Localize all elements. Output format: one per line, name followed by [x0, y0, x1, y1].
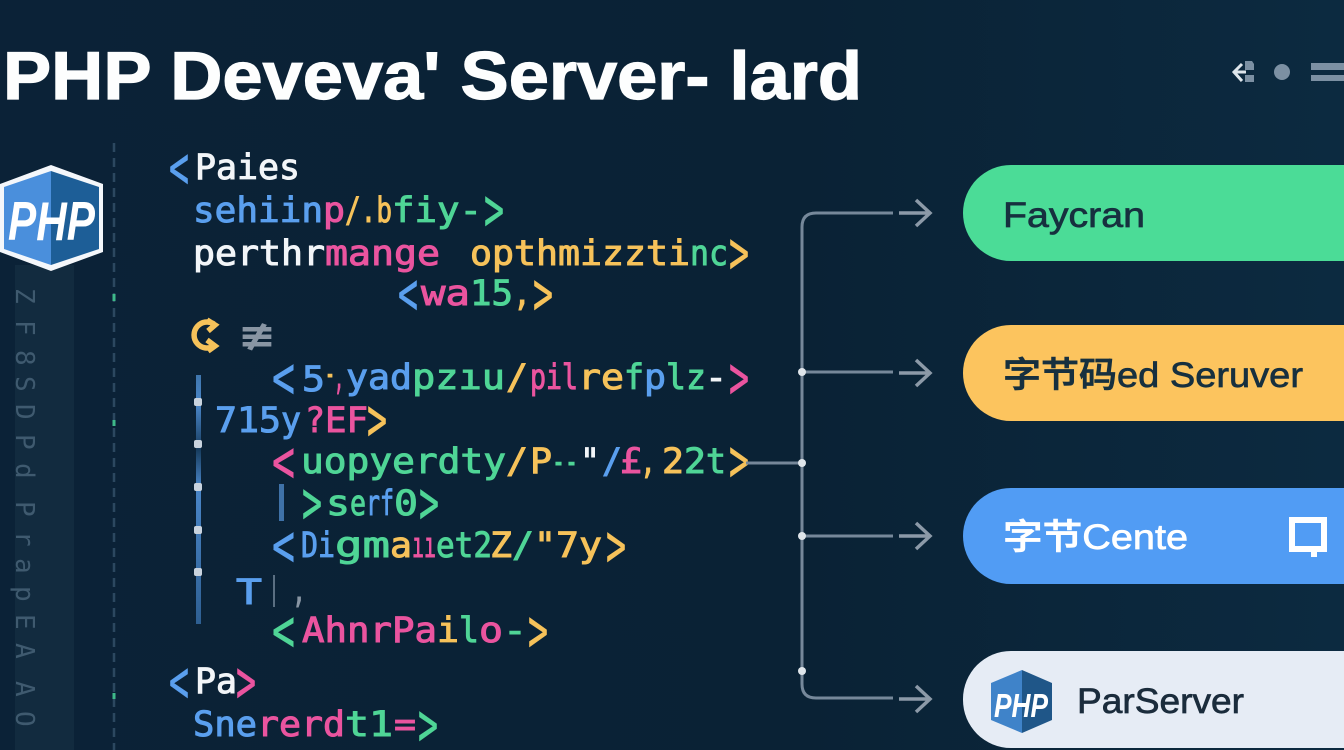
code line 2: p	[323, 191, 345, 231]
left gutter column: O	[9, 711, 39, 727]
code line 12: AhnrPa	[302, 611, 437, 651]
code line 6: f	[624, 358, 644, 398]
code line 2: >	[484, 175, 504, 245]
code line 9: s	[326, 484, 350, 524]
code line 12: o	[479, 611, 503, 651]
code line 10: >	[606, 511, 626, 581]
code line 7	[215, 385, 387, 455]
code line 3: perthr	[193, 234, 325, 274]
icon: yellow refresh glyph	[194, 320, 215, 351]
code line 10: Z	[490, 526, 512, 566]
code line 8	[272, 426, 749, 497]
code line 6: re	[578, 358, 624, 398]
code line 3	[193, 218, 749, 288]
code line 2: fiy-	[392, 191, 482, 231]
code line 7: ?	[305, 401, 325, 441]
not-equal glyph: ≢	[241, 311, 273, 360]
code line 1: Paies	[195, 148, 300, 188]
code line 9	[279, 468, 439, 538]
code line 14: rerd	[257, 705, 345, 745]
code line 1: <	[169, 133, 189, 203]
code line 7: >	[367, 385, 387, 455]
code line 3: >	[729, 218, 749, 288]
code line 6: <	[272, 343, 295, 413]
dashed gutter line	[112, 143, 116, 750]
code line 12: l	[459, 611, 479, 651]
code line 13	[169, 647, 256, 717]
pill: PHP server	[963, 651, 1344, 748]
icon: small PHP logo	[991, 670, 1052, 733]
code line 3: mange	[325, 234, 440, 274]
left gutter column: F	[9, 320, 39, 336]
code line 6: pzıu	[412, 358, 505, 398]
icon: PHP logo: PHP	[8, 190, 95, 252]
icon: square	[1292, 520, 1324, 557]
code line 10: Di	[301, 526, 335, 566]
code line 10: <	[272, 511, 295, 581]
code line 2: /.b	[345, 191, 392, 231]
code line 2: sehiin	[193, 191, 323, 231]
code line 6: yad	[346, 358, 412, 398]
code line 4	[398, 259, 553, 329]
left gutter column: A	[9, 681, 39, 697]
left gutter column: 8	[9, 350, 39, 366]
code line 6: ,	[334, 358, 344, 398]
code line 7: y	[281, 401, 301, 441]
vertical scope bar	[194, 375, 202, 624]
code line 6: 5	[302, 360, 325, 400]
code line 12	[272, 596, 548, 666]
code line 8: £	[620, 442, 642, 482]
code line 8: /	[602, 442, 622, 482]
code line 4: 15	[470, 274, 513, 314]
arrows	[899, 200, 930, 712]
pill: byte center: 字节Cente	[1003, 518, 1188, 557]
code line 10: a	[390, 526, 412, 566]
pill: bytecode server: 字节码ed Seruver	[1003, 356, 1303, 395]
code line 9: rf	[366, 484, 394, 524]
code line 2	[193, 175, 504, 245]
code line 10: 7y	[556, 526, 602, 566]
code line 8: t	[706, 442, 726, 482]
left gutter column: r	[9, 531, 39, 547]
icon: PHP logo	[0, 165, 103, 271]
code line 8: uopyerdty	[301, 442, 506, 482]
code line 6: -	[325, 354, 335, 394]
code line 13: >	[236, 647, 256, 717]
code line 7: EF	[325, 401, 368, 441]
code line 14: =	[394, 705, 416, 745]
code line 8: P	[530, 442, 552, 482]
left gutter column: d	[9, 463, 39, 479]
code line 8: <	[272, 427, 295, 497]
code line 10: "	[534, 526, 556, 566]
code line 9: e	[350, 484, 366, 524]
left gutter column: A	[9, 643, 39, 659]
left gutter column: E	[9, 614, 39, 630]
left gutter column: D	[9, 404, 39, 420]
connector lines	[746, 213, 893, 698]
pill: Faycran: Faycran	[1003, 196, 1145, 235]
code line 10: ıı	[412, 526, 436, 566]
code line 8: ,	[640, 442, 656, 482]
code line 6: /	[506, 358, 528, 398]
code line 4: ,	[513, 274, 531, 314]
code line 6	[272, 343, 749, 413]
pill: byte center	[963, 488, 1344, 584]
code line 9: >	[302, 468, 322, 538]
left gutter column: p	[9, 586, 39, 602]
code line 3: opthmizzti	[470, 234, 690, 274]
code line 4: >	[533, 259, 553, 329]
code line 11	[236, 571, 306, 613]
code line 10: et2	[436, 526, 492, 566]
code line 8: >	[729, 426, 749, 496]
left gutter column: S	[9, 376, 39, 392]
code line 12: >	[528, 596, 548, 666]
code line 10	[272, 511, 626, 581]
code line 6: pil	[530, 358, 578, 398]
left gutter column: P	[9, 501, 39, 517]
code line 8: "	[580, 442, 600, 482]
code line 6: -	[705, 358, 727, 398]
code line 14: t1	[345, 705, 393, 745]
left gutter column: P	[9, 434, 39, 450]
code line 9: 0	[394, 484, 418, 524]
code line 14	[193, 690, 438, 750]
code line 4: <	[398, 259, 418, 329]
code line 12: -	[503, 611, 527, 651]
code line 13: <	[169, 647, 189, 717]
title: PHP Deveva' Server- lard	[3, 38, 862, 114]
code line 10: /	[512, 526, 534, 566]
left gutter column: Z	[9, 288, 39, 304]
code line 6: >	[729, 343, 749, 413]
icon: top-right window controls	[1234, 61, 1344, 82]
code line 12: i	[437, 611, 459, 651]
code line 10: gm	[335, 526, 390, 566]
code line 13: Pa	[195, 662, 237, 702]
code line 8: 2	[662, 442, 684, 482]
code line 6: lz	[666, 358, 706, 398]
pill: PHP server: ParServer	[1077, 682, 1244, 721]
code line 11: ,	[292, 571, 306, 611]
code line 4: wa	[421, 274, 470, 314]
left gutter column	[9, 265, 74, 750]
code line 8: /	[506, 442, 528, 482]
icon: small PHP logo: PHP	[994, 687, 1049, 724]
code line 7: 715	[215, 401, 281, 441]
code line 3: nc	[690, 234, 728, 274]
pill: bytecode server	[963, 325, 1344, 421]
code line 12: <	[272, 596, 295, 666]
code line 14: Sne	[193, 705, 257, 745]
left gutter column: a	[9, 558, 39, 574]
code line 8: 2	[684, 442, 706, 482]
code line 9: >	[419, 468, 439, 538]
code line 11: T	[236, 573, 262, 613]
pill: Faycran	[963, 165, 1344, 261]
code line 1	[169, 133, 300, 203]
code line 6: p	[644, 358, 666, 398]
code line 8: --	[552, 442, 578, 482]
code block	[169, 133, 749, 750]
